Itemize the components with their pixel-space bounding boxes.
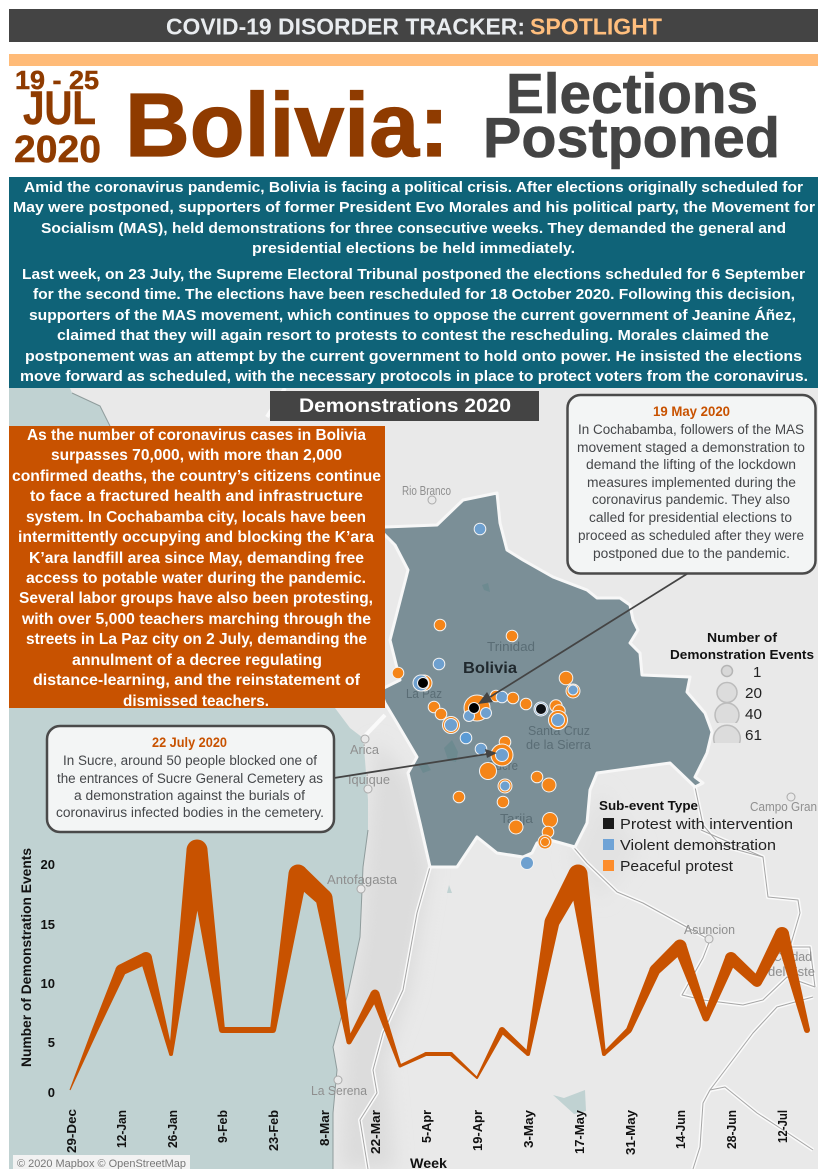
chart: y axis title: Number of Demonstration Events (19, 848, 34, 1067)
chart: x axis ticks: 23-Feb (266, 1110, 281, 1151)
panel: introduction text: for the second time. The elections have been rescheduled for 18 October 2020. Following this decision, (33, 286, 795, 303)
heading: Demonstrations 2020: Demonstrations 2020 (299, 396, 511, 417)
map: city labels: Campo Gran (750, 800, 817, 814)
map: lakes (418, 583, 490, 773)
header banner: SPOTLIGHT (530, 14, 662, 40)
panel: country situation text: K’ara landfill area since May, demanding free (29, 550, 364, 567)
legend: number of demonstration events: 1 (753, 664, 761, 681)
map: city labels (311, 484, 817, 1098)
legend: number of demonstration events: 40 (745, 706, 762, 723)
callout: 19 May 2020: 19 May 2020 (653, 404, 730, 419)
callout: 19 May 2020: postponed due to the pandemic. (593, 546, 790, 561)
chart: x axis ticks: 28-Jun (724, 1110, 739, 1149)
panel: introduction text: postponement was an attempt by the current government to hold onto power. He insisted the elections (25, 348, 802, 365)
legend: number of demonstration events: 61 (745, 727, 762, 744)
map: demonstration event markers (392, 523, 580, 870)
panel: country situation text: annulment of a decree regulating (72, 652, 322, 669)
panel: introduction text: May were postponed, supporters of former President Evo Morales and his political party, the Movement for (13, 199, 815, 216)
callout: 19 May 2020: proceed as scheduled after they were (578, 528, 804, 543)
header banner: COVID-19 DISORDER TRACKER: (166, 14, 525, 40)
callout: 19 May 2020: measures implemented during the (587, 475, 796, 490)
chart: x axis ticks: 8-Mar (317, 1110, 332, 1146)
panel: country situation text: to face a fractured health and infrastructure (30, 488, 363, 505)
chart: x axis ticks: 9-Feb (215, 1110, 230, 1143)
chart: x axis ticks: 14-Jun (673, 1110, 688, 1149)
chart: y axis ticks (41, 857, 55, 1100)
heading: Demonstrations 2020 (270, 391, 539, 421)
callout: 22 July 2020 (47, 726, 334, 832)
panel: introduction text: supporters of the MAS movement, which continues to oppose the current government of Jeanine Áñez, (29, 307, 796, 324)
map: city labels: del Este (768, 965, 815, 979)
arrow: Sucre callout to event (334, 749, 497, 778)
map: city labels: Arica (350, 743, 379, 757)
callout: 19 May 2020: In Cochabamba, followers of the MAS (578, 422, 804, 437)
map: city labels: Antofagasta (327, 873, 397, 887)
map: city labels: de la Sierra (526, 737, 592, 752)
panel: country situation text: As the number of coronavirus cases in Bolivia (27, 427, 366, 444)
map: city labels: La Serena (311, 1084, 367, 1098)
callout: 22 July 2020: the entrances of Sucre General Cemetery as (57, 771, 323, 786)
accent bar (9, 54, 818, 66)
chart: x axis ticks: 5-Apr (419, 1110, 434, 1143)
chart: x axis ticks: 12-Jan (114, 1110, 129, 1148)
chart: weekly demonstration events (variable-width line) (70, 840, 810, 1090)
callout: 19 May 2020: coronavirus pandemic. They also (592, 492, 790, 507)
panel: country situation text: intermittently occupying and blocking the K’ara (18, 529, 374, 546)
panel: country situation text: access to potable water during the pandemic. (26, 570, 366, 587)
panel: country situation text: Several labor groups have also been protesting, (19, 590, 373, 607)
map: city labels: Iquique (348, 773, 390, 787)
panel: introduction text: move forward as scheduled, with the necessary protocols in place to protect voters from the coronavirus. (20, 368, 808, 385)
chart: x axis ticks: 26-Jan (165, 1110, 180, 1148)
chart: y axis ticks: 0 (48, 1085, 55, 1100)
callout: 22 July 2020: In Sucre, around 50 people blocked one of (63, 753, 317, 768)
legend: sub-event type: Violent demonstration (620, 837, 776, 854)
callout: 22 July 2020: coronavirus infected bodies in the cemetery. (56, 805, 324, 820)
panel: country situation text: streets in La Paz city on 2 July, demanding the (26, 631, 367, 648)
panel: country situation text (9, 426, 385, 710)
chart: x axis ticks: 3-May (521, 1109, 536, 1148)
panel: country situation text: system. In Cochabamba city, locals have been (26, 509, 366, 526)
map: city labels: Tarija (500, 811, 534, 826)
panel: introduction text: claimed that they will again resort to protests to contest the rescheduling. Morales claimed the (57, 327, 769, 344)
callout: 19 May 2020: demand the lifting of the lockdown (586, 457, 796, 472)
panel: introduction text: presidential elections be held immediately. (252, 240, 575, 257)
panel: country situation text: dismissed teachers. (123, 693, 269, 710)
panel: introduction text: Last week, on 23 July, the Supreme Electoral Tribunal postponed the elections scheduled for 6 September (22, 266, 805, 283)
date block: JUL (23, 81, 96, 134)
legend: sub-event type: Sub-event Type (599, 798, 698, 813)
map: city labels: Sucre (488, 758, 518, 773)
legend: sub-event type (599, 798, 793, 875)
map: city labels: Ciudad (773, 950, 812, 964)
legend: number of demonstration events: 20 (745, 685, 762, 702)
panel: country situation text: confirmed deaths, the country’s citizens continue (12, 468, 381, 485)
chart: x axis ticks: 31-May (623, 1109, 638, 1155)
date block (14, 65, 101, 171)
chart: y axis ticks: 20 (41, 857, 55, 872)
panel: introduction text (9, 177, 818, 388)
legend: sub-event type: Peaceful protest (620, 858, 734, 875)
title: Bolivia: Bolivia: (125, 76, 449, 176)
panel: country situation text: distance-learning, and the reinstatement of (33, 672, 361, 689)
panel: introduction text: Amid the coronavirus pandemic, Bolivia is facing a political crisis. After elections originally scheduled for (24, 179, 803, 196)
legend: sub-event type: Protest with intervention (620, 816, 793, 833)
chart: x axis ticks (64, 1109, 790, 1155)
callout: 22 July 2020: 22 July 2020 (152, 735, 227, 750)
map: city labels: Trinidad (487, 639, 535, 654)
base map (9, 388, 818, 1169)
map: city labels: Santa Cruz (528, 723, 590, 738)
chart: x axis ticks: 19-Apr (470, 1110, 485, 1151)
map label: Bolivia: Bolivia (463, 660, 517, 677)
legend: number of demonstration events: Demonstration Events (670, 648, 814, 662)
arrow: Cochabamba callout to event (478, 572, 690, 704)
date block: 19 - 25 (15, 65, 99, 95)
map: city labels: Asuncion (684, 923, 735, 937)
subtitle: Elections Postponed (483, 62, 780, 170)
callout: 19 May 2020 (568, 395, 816, 574)
subtitle: Elections Postponed: Postponed (483, 106, 780, 170)
map: Bolivia country shape (370, 493, 712, 867)
callout: 19 May 2020: called for presidential elections to (589, 510, 792, 525)
date block: 2020 (14, 129, 101, 171)
panel: country situation text: surpasses 70,000, with more than 2,000 (51, 447, 342, 464)
chart: y axis ticks: 10 (41, 976, 55, 991)
chart: x axis ticks: 17-May (572, 1109, 587, 1154)
subtitle: Elections Postponed: Elections (506, 62, 758, 126)
chart: y axis ticks: 5 (48, 1035, 55, 1050)
chart: x axis ticks: 12-Jul (775, 1110, 790, 1143)
legend: number of demonstration events (670, 631, 814, 752)
panel: introduction text: Socialism (MAS), held demonstrations for three consecutive weeks. They demanded the general and (41, 220, 786, 237)
chart: x axis ticks: 22-Mar (368, 1110, 383, 1154)
chart: y axis ticks: 15 (41, 917, 55, 932)
legend: number of demonstration events: Number of (707, 631, 778, 645)
callout: 22 July 2020: a demonstration against the burials of (74, 788, 305, 803)
chart: x axis ticks: 29-Dec (64, 1109, 79, 1153)
panel: country situation text: with over 5,000 teachers marching through the (21, 611, 371, 628)
header banner (9, 9, 818, 42)
callout: 19 May 2020: movement staged a demonstration to (577, 440, 805, 455)
map: city labels: Rio Branco (402, 484, 451, 498)
map: city labels: La Paz (406, 686, 442, 701)
